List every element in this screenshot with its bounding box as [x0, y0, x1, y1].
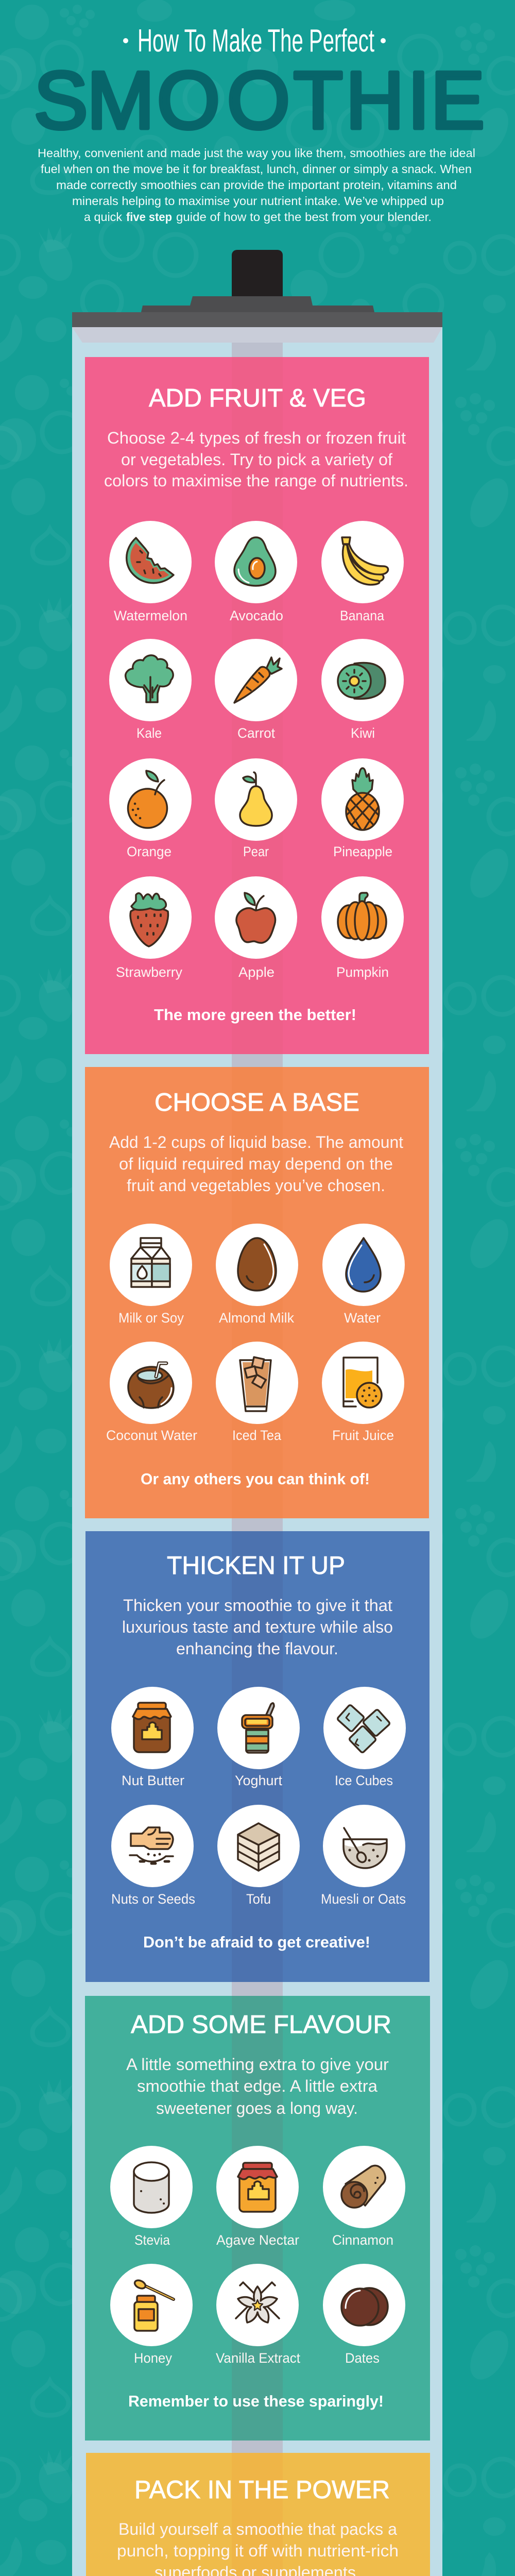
label: Kiwi [351, 725, 375, 741]
item: pineapple [321, 758, 404, 859]
item: avocado [215, 521, 297, 623]
subtitle: How To Make The Perfect: How To Make The Perfect [138, 23, 374, 59]
item: pear [215, 758, 297, 859]
panel: pack in the power [86, 2453, 430, 2576]
heading: THICKEN IT UP [167, 1552, 345, 1580]
heading: ADD SOME FLAVOUR [131, 2011, 391, 2039]
icon: pineapple [346, 768, 379, 830]
label: Milk or Soy [118, 1310, 184, 1326]
label: Ice Cubes [335, 1773, 393, 1788]
label: Agave Nectar [216, 2232, 299, 2248]
description [109, 1133, 403, 1195]
icon: pear [240, 772, 272, 826]
item: coconut water [106, 1342, 197, 1443]
item: honey [110, 2264, 193, 2366]
icon: almond [238, 1238, 276, 1291]
subtitle: How To Make The Perfect [123, 23, 386, 59]
description: Thicken your smoothie to give it that [123, 1596, 392, 1615]
item: apple [215, 876, 297, 980]
label: Honey [134, 2350, 172, 2366]
label: Avocado [230, 608, 283, 623]
icon: coconut [128, 1363, 174, 1408]
description: fruit and vegetables you’ve chosen. [127, 1176, 385, 1195]
icon: pumpkin [338, 893, 386, 940]
description: colors to maximise the range of nutrients. [104, 471, 408, 490]
label: Coconut Water [106, 1428, 197, 1443]
icon: yoghurt [242, 1703, 274, 1753]
intro paragraph: Healthy, convenient and made just the way you like them, smoothies are the ideal [38, 146, 475, 160]
item: stevia [110, 2146, 193, 2248]
label: Iced Tea [232, 1428, 282, 1443]
label: Banana [340, 608, 385, 623]
item: kale [109, 639, 192, 741]
description: of liquid required may depend on the [119, 1155, 393, 1173]
label: Vanilla Extract [216, 2350, 300, 2366]
icon: muesli bowl [344, 1828, 387, 1868]
label: Fruit Juice [332, 1428, 394, 1443]
item: orange [109, 758, 192, 859]
icon: ice cubes [337, 1704, 390, 1753]
item: carrot [215, 639, 297, 741]
icon: strawberry [130, 893, 168, 946]
footer note: Don’t be afraid to get creative! [143, 1933, 370, 1951]
intro paragraph: made correctly smoothies can provide the important protein, vitamins and [56, 178, 457, 192]
label: Watermelon [114, 608, 187, 623]
label: Cinnamon [332, 2232, 393, 2248]
label: Pumpkin [336, 964, 389, 980]
icon: watermelon [127, 538, 174, 583]
heading: ADD FRUIT & VEG [149, 384, 366, 412]
panel: add fruit & veg [85, 357, 429, 1054]
icon: carrot [234, 657, 282, 703]
lid underside shadow [72, 327, 442, 343]
description: A little something extra to give your [126, 2055, 389, 2074]
header [34, 23, 485, 224]
label: Dates [345, 2350, 380, 2366]
blender jug [72, 250, 442, 2576]
label: Nuts or Seeds [111, 1891, 195, 1907]
item: vanilla extract [216, 2264, 300, 2366]
heading: PACK IN THE POWER [134, 2476, 390, 2504]
description: enhancing the flavour. [176, 1639, 338, 1658]
description [122, 1596, 393, 1658]
item: banana [321, 521, 404, 623]
item: strawberry [109, 876, 192, 980]
intro paragraph: fuel when on the move be it for breakfast, lunch, dinner or simply a snack. When [41, 162, 472, 176]
item: milk or soy [110, 1224, 192, 1326]
description [117, 2520, 399, 2576]
glass body [72, 327, 442, 2576]
intro paragraph: minerals helping to maximise your nutrient intake. We’ve whipped up [72, 194, 444, 208]
label: Muesli or Oats [321, 1891, 406, 1907]
item: iced tea [216, 1342, 298, 1443]
item: ice cubes [323, 1687, 406, 1788]
description: punch, topping it off with nutrient-rich [117, 2541, 399, 2560]
description: Add 1-2 cups of liquid base. The amount [109, 1133, 403, 1151]
item: cinnamon [323, 2146, 405, 2248]
footer note: Or any others you can think of! [141, 1470, 370, 1488]
footer note: Remember to use these sparingly! [128, 2392, 384, 2410]
label: Tofu [246, 1891, 271, 1907]
label: Stevia [134, 2232, 170, 2248]
icon: kiwi [338, 663, 385, 699]
icon: water drop [346, 1238, 381, 1292]
item: nut butter [111, 1687, 194, 1788]
label: Nut Butter [122, 1773, 184, 1788]
icon: dates [341, 2288, 388, 2326]
intro paragraph: five step [126, 210, 172, 224]
icon: avocado [234, 537, 276, 586]
icon: milk carton [131, 1238, 170, 1287]
icon: fruit juice [344, 1358, 382, 1408]
description: sweetener goes a long way. [156, 2099, 358, 2117]
intro paragraph [38, 146, 475, 224]
label: Strawberry [116, 964, 182, 980]
label: Yoghurt [235, 1773, 282, 1788]
panel: thicken it up [85, 1531, 430, 1982]
description: smoothie that edge. A little extra [137, 2077, 377, 2095]
item: water [322, 1224, 405, 1326]
icon: honey [133, 2279, 174, 2331]
icon: apple [236, 893, 275, 943]
icon: orange [128, 771, 167, 828]
panel: add some flavour [85, 1996, 430, 2441]
item: kiwi [321, 639, 404, 741]
icon: tofu [238, 1823, 279, 1871]
icon: nut butter jar [133, 1703, 171, 1752]
panel: choose a base [85, 1067, 429, 1518]
item: tofu [217, 1805, 300, 1907]
icon: kale [126, 655, 173, 702]
description: or vegetables. Try to pick a variety of [121, 450, 392, 469]
item: muesli or oats [321, 1805, 406, 1907]
item: agave nectar [216, 2146, 299, 2248]
icon: iced tea [240, 1357, 271, 1411]
icon: agave jar [238, 2163, 277, 2212]
label: Almond Milk [219, 1310, 294, 1326]
label: Orange [127, 844, 171, 859]
description [104, 429, 408, 490]
label: Pear [243, 844, 269, 859]
intro paragraph: a quick [84, 210, 123, 224]
intro paragraph: guide of how to get the best from your blender. [176, 210, 432, 224]
item: pumpkin [321, 876, 404, 980]
item: almond milk [216, 1224, 298, 1326]
shaft [232, 343, 283, 2576]
item: watermelon [109, 521, 192, 623]
item: dates [323, 2264, 405, 2366]
icon: vanilla flower [236, 2282, 279, 2323]
description: Choose 2-4 types of fresh or frozen fruit [107, 429, 406, 447]
description: Build yourself a smoothie that packs a [118, 2520, 397, 2538]
icon: hand with seeds [130, 1827, 173, 1863]
icon: cinnamon [341, 2165, 385, 2208]
item: yoghurt [217, 1687, 300, 1788]
label: Carrot [237, 725, 275, 741]
item: fruit juice [322, 1342, 404, 1443]
lid handle [232, 250, 283, 296]
footer note: The more green the better! [154, 1006, 356, 1024]
label: Kale [136, 725, 162, 741]
description: luxurious taste and texture while also [122, 1618, 393, 1636]
label: Apple [238, 964, 274, 980]
icon: stevia [134, 2162, 169, 2213]
label: Water [344, 1310, 381, 1326]
heading: CHOOSE A BASE [154, 1089, 359, 1116]
lid [72, 296, 442, 327]
item: nuts or seeds [111, 1805, 195, 1907]
label: Pineapple [333, 844, 392, 859]
title: SMOOTHIE: SMOOTHIE [34, 55, 485, 146]
description [126, 2055, 389, 2117]
icon: banana [342, 537, 388, 585]
